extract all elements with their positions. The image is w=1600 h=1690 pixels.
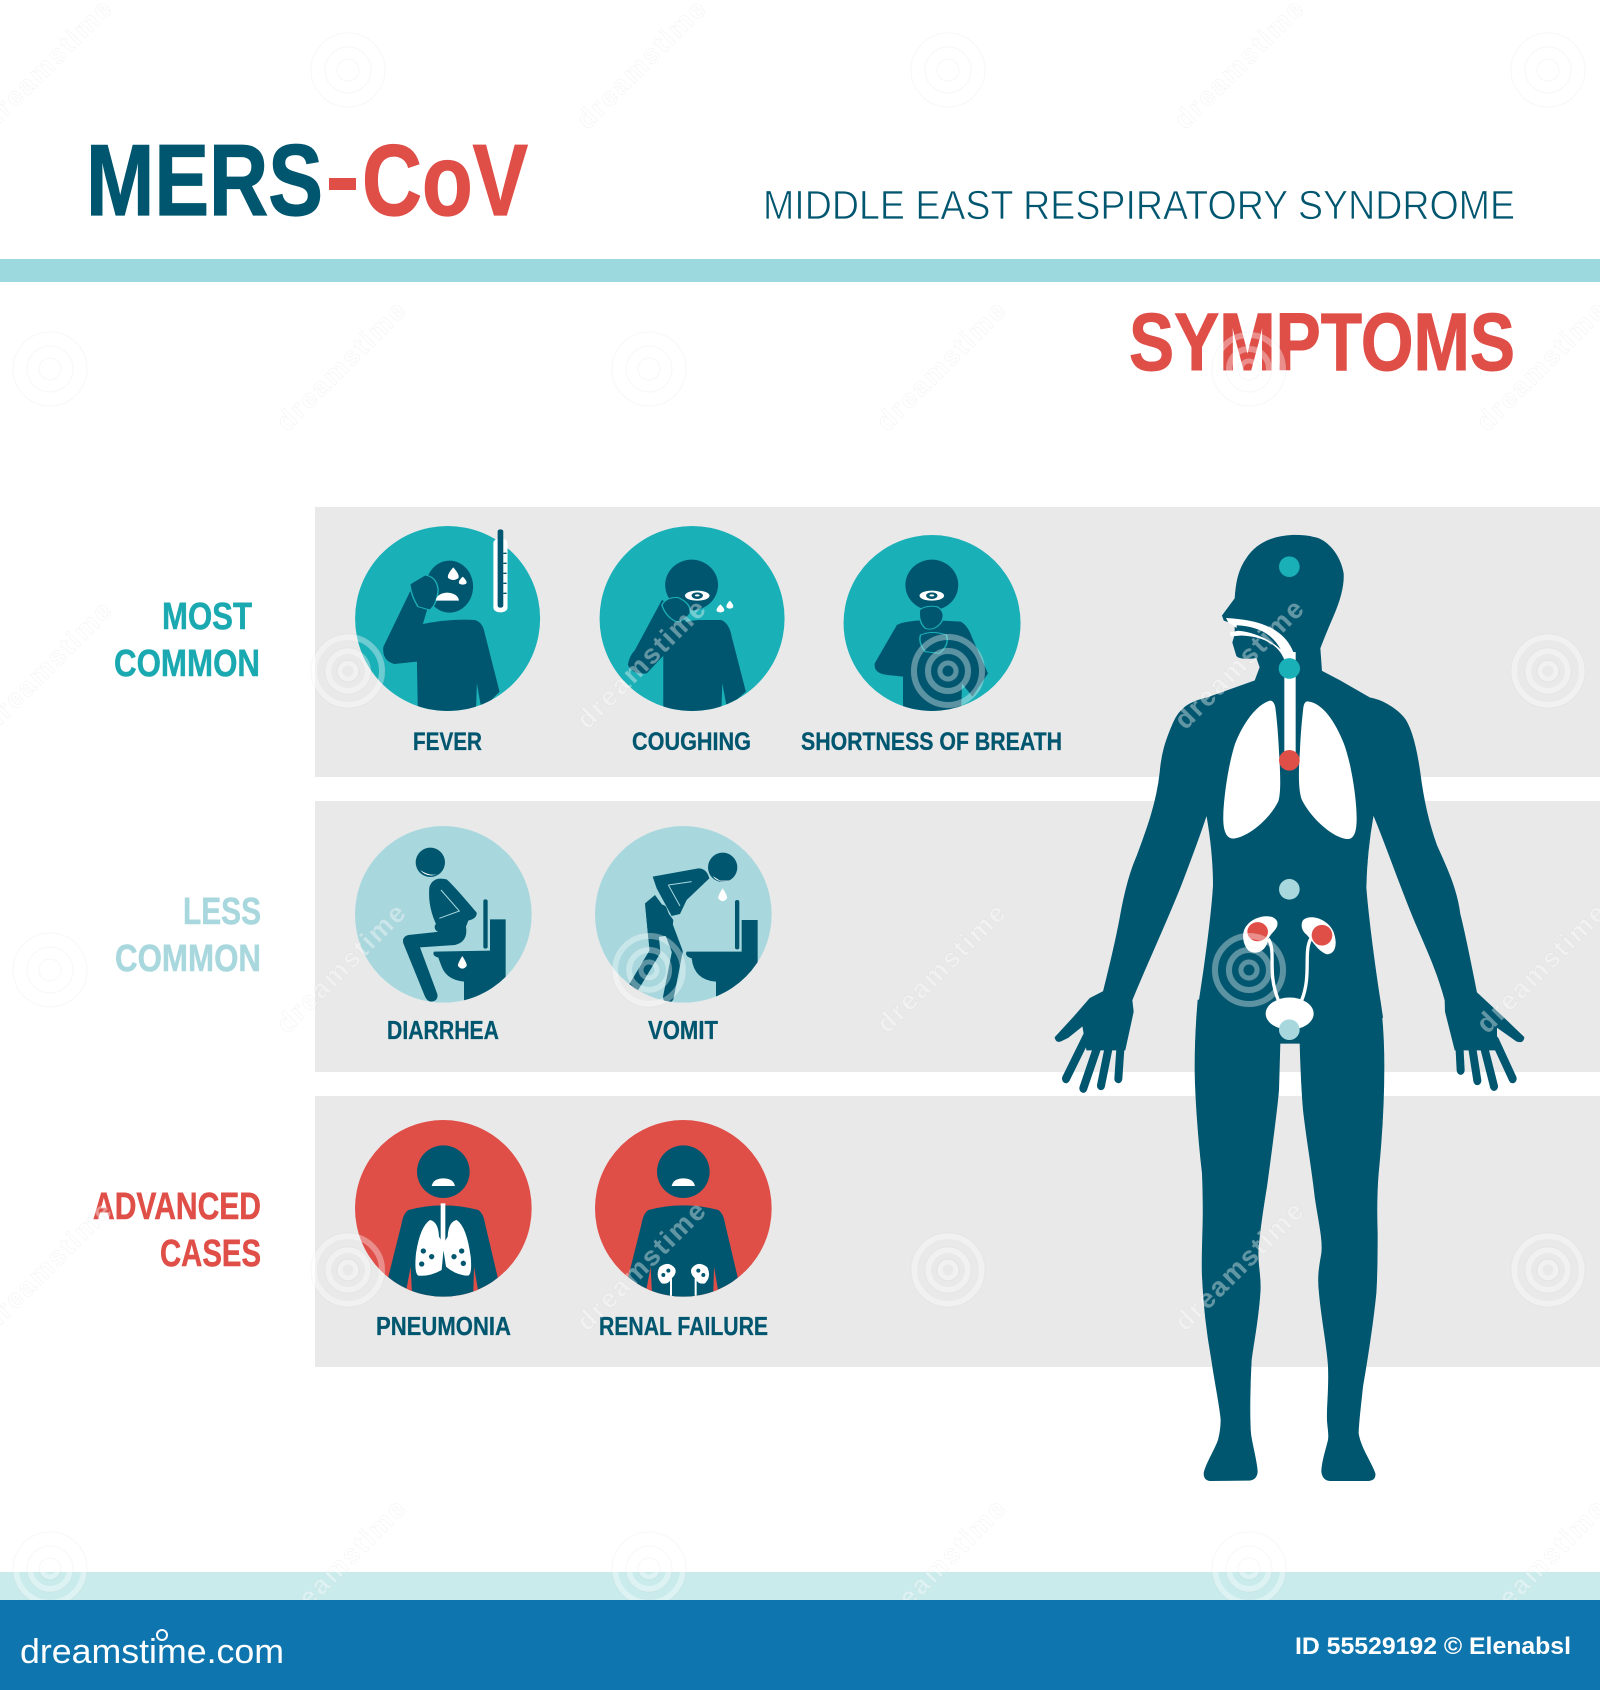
panel: most common <box>315 507 1600 777</box>
icon: shortness of breath <box>844 535 1021 713</box>
panel: less common <box>315 801 1600 1072</box>
silhouette: legs <box>1195 1000 1384 1481</box>
heading: symptoms: SYMPTOMS <box>1129 297 1515 388</box>
caption: renal failure: RENAL FAILURE <box>599 1311 768 1341</box>
footer bar <box>0 1600 1600 1690</box>
caption: shortness of breath: SHORTNESS OF BREATH <box>801 728 1062 756</box>
watermark: dreamstime text: dreamstime <box>870 1492 1013 1635</box>
watermark: dreamstime text: dreamstime <box>1168 1194 1311 1337</box>
icon: renal failure <box>595 1120 772 1303</box>
label: advanced cases <box>93 1186 261 1275</box>
watermark: dreamstime text: dreamstime <box>570 592 713 735</box>
silhouette: upper body <box>1055 535 1524 1088</box>
label: most common: MOST <box>162 596 252 638</box>
footer id credit: ID 55529192 © Elenabsl <box>1295 1633 1571 1660</box>
icon: fever <box>355 526 540 713</box>
label: most common: COMMON <box>114 643 260 685</box>
footer logo: dreamstime.com: dreamstime.com <box>20 1633 284 1671</box>
caption: coughing: COUGHING <box>632 728 751 756</box>
label: most common <box>114 596 260 685</box>
title: MERS-CoV <box>86 125 528 237</box>
icon: vomit <box>595 826 772 1003</box>
watermark: dreamstime text: dreamstime <box>870 896 1013 1039</box>
caption: pneumonia: PNEUMONIA <box>376 1311 511 1341</box>
icon: diarrhea <box>355 826 532 1003</box>
watermark: dreamstime text: dreamstime <box>270 1492 413 1635</box>
icon: coughing <box>600 526 785 713</box>
caption: vomit: VOMIT <box>648 1015 718 1045</box>
watermark: dreamstime text: dreamstime <box>270 294 413 437</box>
label: less common <box>115 891 261 980</box>
title: MERS-CoV: MERS <box>86 125 323 237</box>
bottom band <box>0 1572 1600 1600</box>
label: advanced cases: ADVANCED <box>93 1186 261 1228</box>
caption: diarrhea: DIARRHEA <box>387 1015 499 1045</box>
caption: fever: FEVER <box>413 728 482 756</box>
icon: pneumonia <box>355 1120 532 1303</box>
subtitle: middle east respiratory syndrome: MIDDLE EAST RESPIRATORY SYNDROME <box>763 182 1515 228</box>
human body figure <box>1055 535 1524 1481</box>
label: advanced cases: CASES <box>160 1233 261 1275</box>
label: less common: LESS <box>183 891 261 933</box>
organs <box>1223 556 1357 1040</box>
top band <box>0 259 1600 282</box>
panel: advanced cases <box>315 1096 1600 1367</box>
watermark: dreamstime text: dreamstime <box>570 1194 713 1337</box>
label: less common: COMMON <box>115 938 261 980</box>
watermark: dreamstime text: dreamstime <box>270 896 413 1039</box>
watermark: dreamstime text: dreamstime <box>1168 592 1311 735</box>
watermark: dreamstime text: dreamstime <box>870 294 1013 437</box>
title: MERS-CoV: CoV <box>362 125 528 237</box>
